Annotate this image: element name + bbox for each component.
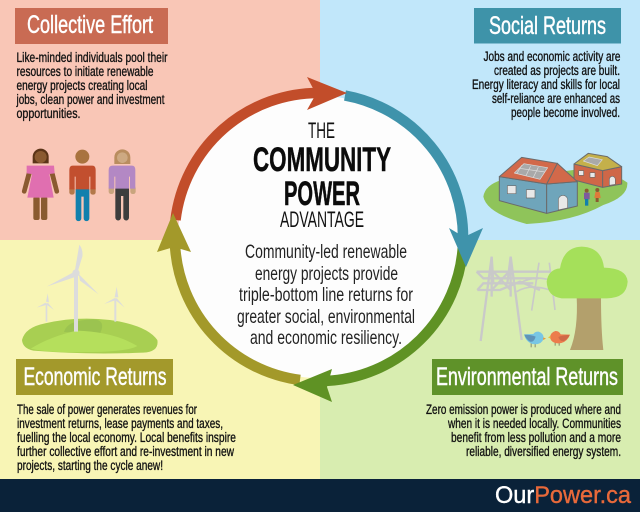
text: social returns [472,49,620,120]
small turbine left [37,293,54,322]
footer [0,479,640,512]
cycle ring with arrows [157,77,483,402]
hills [22,319,158,353]
text: collective effort [16,50,168,121]
center description: energy projects provide [255,263,398,285]
arrowhead: green [293,369,332,402]
center description [237,241,415,349]
text: economic returns: projects, starting the cycle anew! [17,458,163,473]
big house [499,157,577,213]
logo: OurPower.ca: OurPower.ca [495,482,631,509]
person: woman in purple shirt [109,149,136,220]
text: environmental returns [426,402,621,459]
center description: greater social, environmental [237,306,415,328]
text: collective effort: opportunities. [16,106,80,121]
text: collective effort: jobs, clean power and investment [16,92,165,107]
text: economic returns: fuelling the local economy. Local benefits inspire [17,430,236,445]
text: economic returns: investment returns, lease payments and taxes, [17,416,223,431]
text: economic returns: The sale of power generates revenues for [17,402,197,417]
icon: wind turbines on hills [22,245,158,353]
small turbine right [104,287,125,322]
two small people [584,188,601,206]
title: THE [308,118,335,143]
panel: collective effort [0,0,320,240]
arrowhead: blue [449,228,483,267]
arrow: collective to social [176,93,320,220]
bird orange [548,331,570,346]
heading: collective effort [15,8,168,44]
arrow: economic to collective [175,245,300,380]
heading: economic returns: Economic Returns [24,363,166,391]
panel: environmental returns [320,240,640,480]
title [253,118,391,232]
heading: social returns [474,8,621,44]
title: POWER [284,175,360,213]
arrow: environmental to economic [325,245,463,381]
panel: social returns [320,0,640,240]
ground [483,170,627,224]
tree [547,247,628,350]
bird blue [524,332,546,347]
person: woman in pink dress [22,149,59,220]
icon: houses with solar roofs [483,153,627,224]
text: collective effort: resources to initiate renewable [16,64,154,79]
arrowhead: red [307,77,347,110]
icon: three people [22,149,136,221]
title: COMMUNITY [253,141,391,179]
center description: and economic resiliency. [250,327,402,349]
person: man in red shirt [69,150,96,221]
arrowhead: olive [157,213,191,252]
small house [574,153,622,187]
heading: economic returns [16,359,173,395]
arrow: social to environmental [345,96,463,240]
text: economic returns: further collective effort and re-investment in new [17,444,234,459]
text: economic returns [17,402,236,473]
center circle [178,96,460,378]
text: collective effort: Like-minded individuals pool their [16,50,168,65]
icon: pylons, tree and birds [477,247,628,350]
heading: collective effort: Collective Effort [27,11,153,39]
pylons [477,257,555,341]
center description: triple-bottom line returns for [239,284,413,306]
big turbine [47,245,99,332]
center description: Community-led renewable [245,241,407,263]
panel: economic returns [0,240,320,480]
title: ADVANTAGE [280,207,364,232]
text: collective effort: energy projects creating local [16,78,148,93]
